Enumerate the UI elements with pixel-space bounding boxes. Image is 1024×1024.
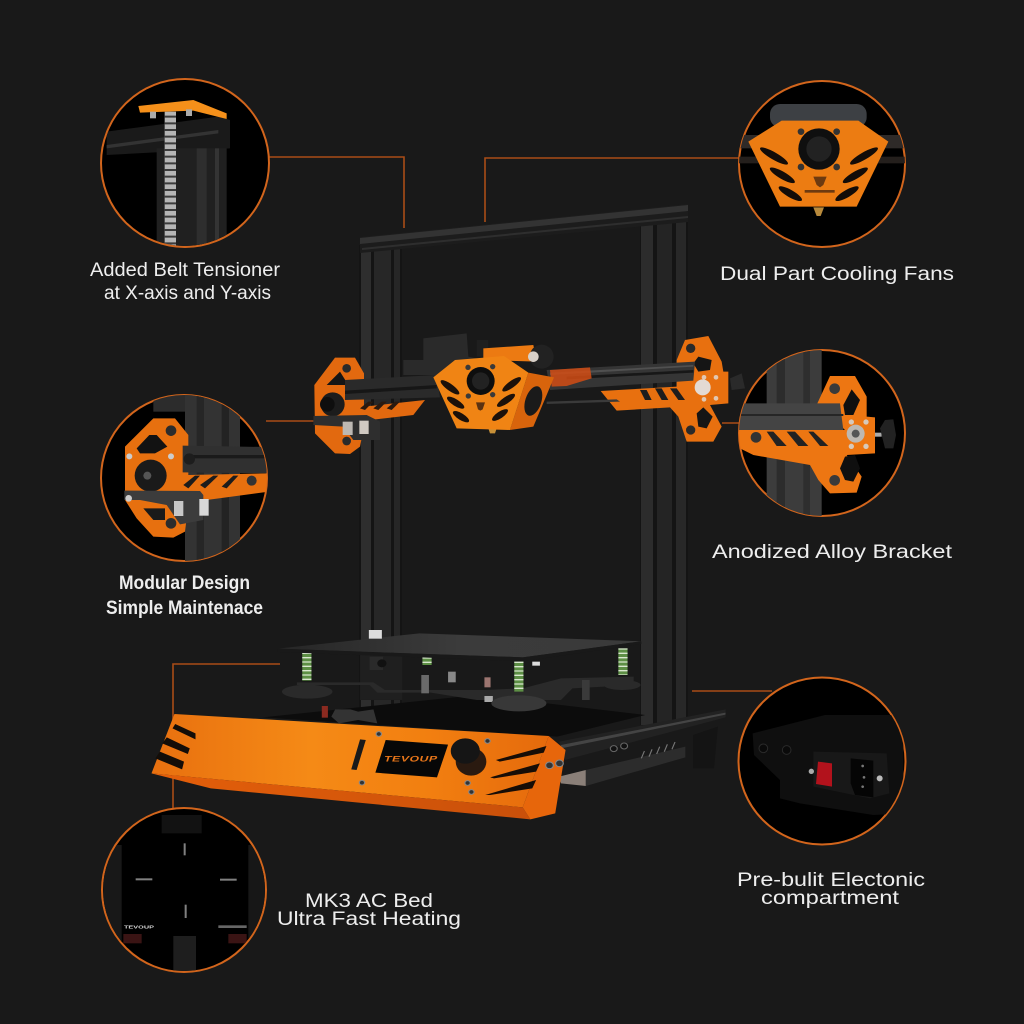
levelling knobs: [282, 680, 641, 711]
caption: electronics compartment: Pre-bulit Electonic: [737, 870, 925, 891]
left endstop plate: [313, 415, 380, 440]
frame: right column: [640, 215, 688, 725]
cover slots: [439, 375, 523, 424]
3D printer: [90, 79, 954, 976]
hotend carriage cover: [433, 356, 554, 430]
X gantry: [313, 333, 745, 454]
card slot: [351, 739, 366, 770]
caption: belt tensioner: [90, 260, 281, 304]
logo on display: TEVOUP: [383, 754, 439, 763]
left belt slots and wheel: [320, 392, 400, 416]
caption: alloy bracket: Anodized Alloy Bracket: [712, 542, 953, 563]
hotend: [488, 428, 497, 433]
part cooling fan: [467, 367, 495, 395]
right orange bracket: [601, 336, 728, 442]
caption: belt tensioner: Added Belt Tensioner: [90, 260, 281, 281]
screws: [359, 732, 563, 794]
circle: heated bed: [102, 808, 267, 976]
caption: heated bed: MK3 AC Bed: [305, 891, 433, 912]
glass bed plate: [278, 633, 641, 661]
caption: heated bed: [277, 891, 461, 930]
circle: belt tensioner: [101, 79, 269, 248]
levelling springs: [307, 648, 623, 692]
caption: modular design: [106, 573, 263, 619]
rotary knob: [451, 738, 486, 776]
caption: heated bed: Ultra Fast Heating: [277, 909, 461, 930]
caption: modular design: Modular Design: [119, 573, 250, 594]
display: [375, 740, 448, 777]
caption: electronics compartment: compartment: [761, 888, 900, 909]
belt wheel: [530, 345, 554, 369]
cover logo: [476, 402, 485, 411]
vent slots left: [155, 724, 195, 769]
circle: alloy bracket: [737, 348, 905, 518]
caption: modular design: Simple Maintenace: [106, 598, 263, 619]
caption: electronics compartment: [737, 870, 925, 909]
side fan: [521, 384, 546, 418]
print bed and base: [151, 630, 726, 819]
caption: cooling fans: Dual Part Cooling Fans: [720, 264, 954, 285]
control box: [151, 714, 566, 819]
X-axis beam: [345, 362, 695, 404]
frame: top bar: [360, 204, 688, 253]
circle: modular design: [101, 395, 268, 562]
circle: cooling fans: [737, 81, 910, 247]
base rail: [262, 695, 726, 786]
vent slots right: [485, 746, 546, 795]
frame: left column: [359, 245, 402, 715]
leader lines: [173, 157, 772, 810]
circle: heated bed: TEVOUP: [124, 925, 155, 931]
left orange bracket: [314, 358, 425, 454]
cover screws: [465, 364, 495, 399]
right tension knob: [695, 373, 745, 402]
caption: belt tensioner: at X-axis and Y-axis: [104, 283, 271, 304]
circle: electronics compartment: [738, 678, 906, 844]
stepper motor: [403, 333, 537, 375]
bed carriage and arms: [297, 653, 634, 723]
